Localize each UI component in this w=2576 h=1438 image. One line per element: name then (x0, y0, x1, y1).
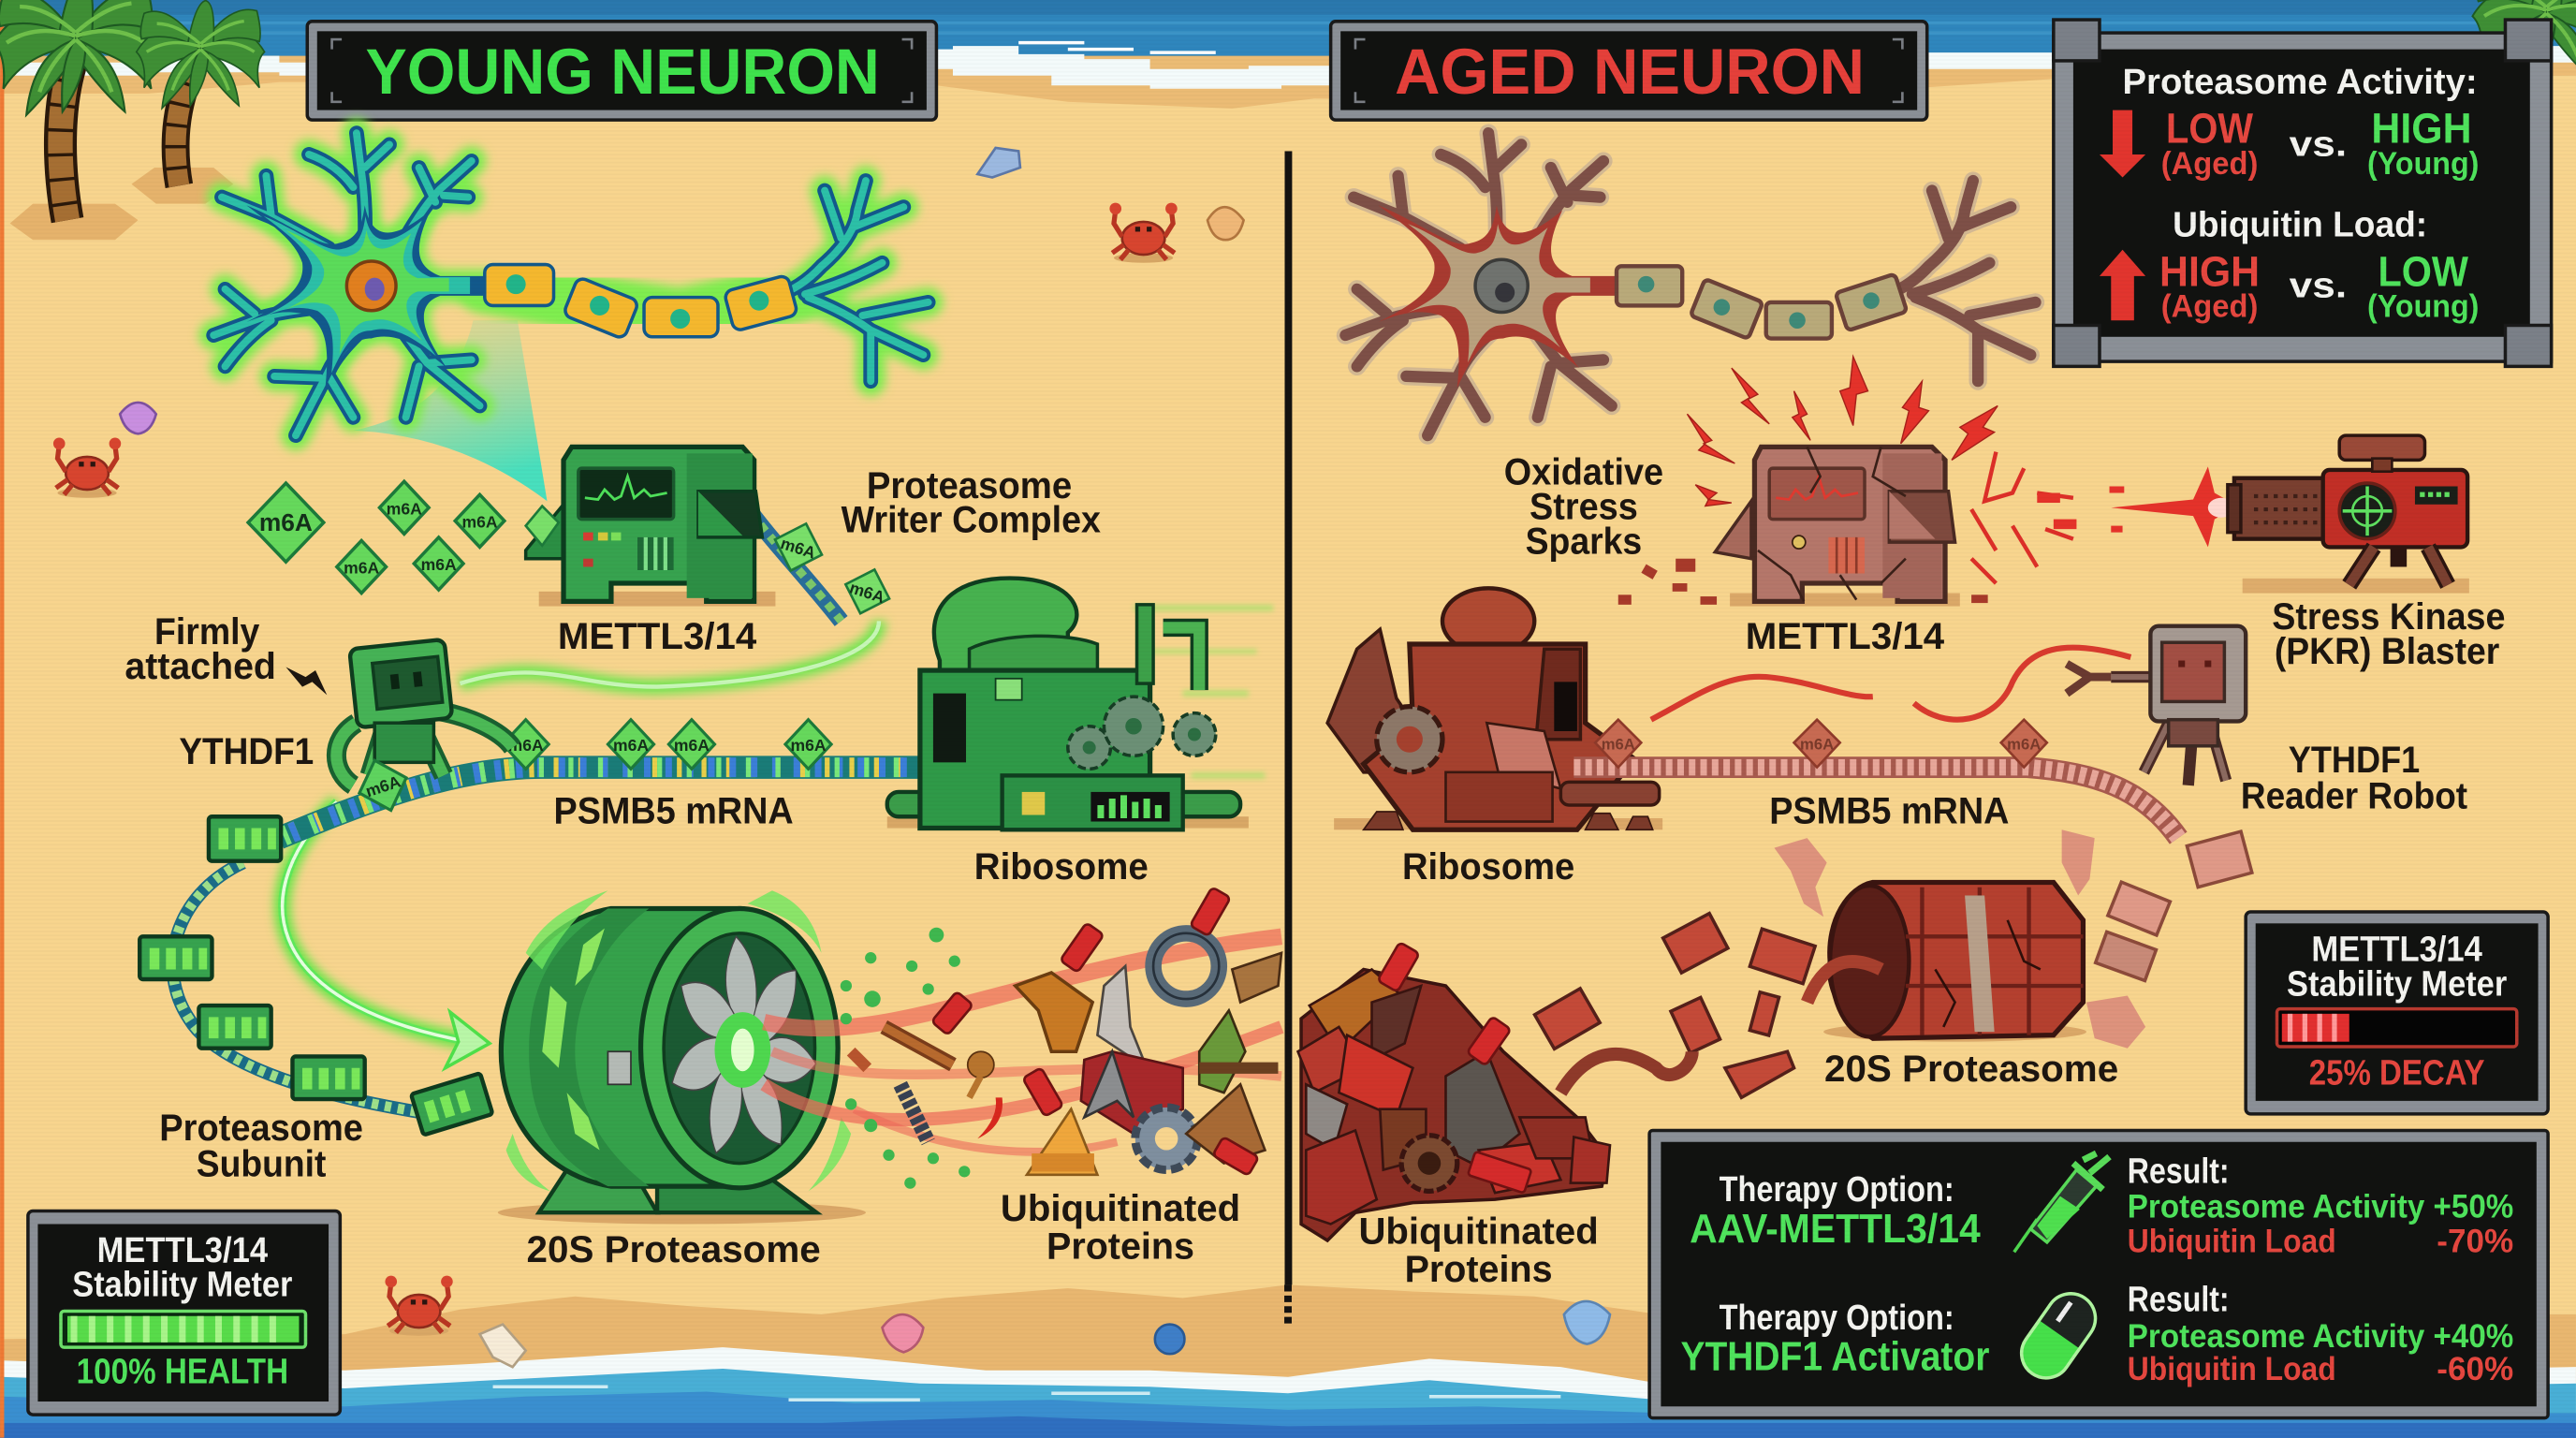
icon: syringe (2014, 1153, 2110, 1252)
callout cone from neuron to writer (353, 320, 547, 501)
panel: aged stability meter: METTL3/14 (2311, 930, 2482, 969)
label: firmly attached: attached (124, 646, 276, 687)
label: firmly attached: Firmly (154, 611, 259, 653)
green return arrow (283, 801, 490, 1068)
panel: proteasome and ubiquitin comparison: LOW (2378, 247, 2469, 295)
panel: proteasome and ubiquitin comparison (2054, 20, 2552, 366)
YTHDF1 reader robot young: m6A (363, 771, 403, 800)
label: oxidative stress sparks: Stress (1530, 487, 1638, 528)
label: 20S proteasome aged: 20S Proteasome (1824, 1049, 2118, 1090)
m6A marks aged: m6A (2007, 735, 2041, 753)
label: PSMB5 mRNA aged: PSMB5 mRNA (1769, 790, 2009, 831)
label: stress kinase blaster (2272, 596, 2505, 672)
label: 20S proteasome young: 20S Proteasome (527, 1229, 821, 1270)
m6A cluster: m6A (387, 499, 422, 518)
stress sparks (1687, 357, 1998, 506)
bottom sea and shoreline (0, 1284, 2576, 1438)
panel: therapy options: YTHDF1 Activator (1680, 1334, 1989, 1380)
ubiquitinated proteins young (764, 887, 1281, 1189)
panel: proteasome and ubiquitin comparison: Ubiquitin Load: (2173, 205, 2427, 244)
strand from writer to robot (460, 501, 879, 687)
icon: capsule (2012, 1284, 2105, 1387)
label: METTL3/14 aged: METTL3/14 (1746, 616, 1944, 657)
label: METTL3/14 young: METTL3/14 (558, 616, 756, 657)
panel: therapy options: -70% (2437, 1223, 2513, 1259)
top sea and shoreline (0, 0, 2576, 109)
20S proteasome young (498, 890, 866, 1224)
panel: therapy options: Ubiquitin Load (2128, 1223, 2336, 1259)
panel: young stability meter: Stability Meter (72, 1265, 293, 1304)
label: ubiquitinated proteins aged (1358, 1211, 1599, 1290)
label: PSMB5 mRNA young: PSMB5 mRNA (554, 790, 794, 831)
label: YTHDF1 young: YTHDF1 (179, 731, 314, 772)
beach critters and shells (53, 148, 1610, 1367)
label: proteasome writer complex: Proteasome (867, 465, 1072, 506)
aged red wavy reader signal (1651, 648, 2130, 720)
label: ubiquitinated proteins young (1001, 1188, 1240, 1267)
m6A marks aged: m6A (1800, 735, 1834, 753)
panel: proteasome and ubiquitin comparison: (Young) (2367, 146, 2479, 182)
icon: palm trees (0, 0, 2576, 240)
panel: therapy options (1649, 1130, 2548, 1418)
mRNA aged strand (1573, 768, 2178, 838)
YTHDF1 reader robot young (336, 639, 513, 818)
panel: young stability meter: METTL3/14 (97, 1230, 268, 1269)
panel: proteasome and ubiquitin comparison: HIGH (2159, 247, 2260, 295)
panel: therapy options: AAV-METTL3/14 (1690, 1206, 1981, 1252)
writer machine METTL3/14 young (526, 447, 897, 621)
left edge stripe (0, 0, 4, 1438)
label: ribosome young: Ribosome (974, 846, 1149, 888)
label: oxidative stress sparks: Sparks (1526, 521, 1642, 562)
m6A marks aged (1595, 720, 2047, 768)
ribosome aged (1327, 588, 1662, 829)
label: YTHDF1 reader robot: Reader Robot (2241, 775, 2467, 816)
panel: therapy options: Proteasome Activity +50% (2128, 1188, 2513, 1225)
label: proteasome subunit: Proteasome (159, 1108, 363, 1149)
m6A marks on mRNA: m6A (613, 736, 649, 755)
label: oxidative stress sparks (1504, 452, 1663, 562)
panel: therapy options: Proteasome Activity +40% (2128, 1318, 2513, 1355)
m6A cluster: m6A (462, 512, 498, 531)
panel: proteasome and ubiquitin comparison: Proteasome Activity: (2123, 62, 2478, 101)
label: YTHDF1 reader robot (2241, 740, 2467, 816)
m6A marks on mRNA: m6A (508, 736, 544, 755)
panel: therapy options: Ubiquitin Load (2128, 1351, 2336, 1387)
m6A marks aged: m6A (1602, 735, 1635, 753)
PKR stress kinase blaster (2037, 435, 2469, 594)
center divider (1284, 151, 1292, 1325)
panel: therapy options: -60% (2437, 1351, 2513, 1387)
panel: therapy options: Therapy Option: (1720, 1169, 1954, 1209)
YTHDF1 reader robot aged (2067, 626, 2246, 785)
label: proteasome writer complex: Writer Complex (842, 500, 1101, 541)
panel: aged stability meter (2246, 912, 2548, 1114)
title: young neuron (307, 22, 936, 120)
label: proteasome subunit (159, 1108, 363, 1185)
panel: proteasome and ubiquitin comparison: (Young) (2367, 289, 2479, 325)
m6A marks on mRNA: m6A (674, 736, 710, 755)
panel: young stability meter: 100% HEALTH (77, 1352, 288, 1391)
aged neuron illustration (1345, 133, 2036, 435)
title: aged neuron (1331, 22, 1927, 120)
panel: proteasome and ubiquitin comparison: vs. (2290, 266, 2347, 305)
label: stress kinase blaster: Stress Kinase (2272, 596, 2505, 638)
panel: therapy options: Result: (2128, 1280, 2230, 1319)
panel: therapy options: Therapy Option: (1720, 1298, 1954, 1337)
m6A cluster (248, 481, 505, 594)
panel: therapy options: Result: (2128, 1152, 2230, 1191)
panel: proteasome and ubiquitin comparison: vs. (2290, 125, 2347, 164)
label: YTHDF1 reader robot: YTHDF1 (2289, 740, 2420, 781)
label: ubiquitinated proteins aged: Ubiquitinated (1358, 1211, 1599, 1253)
label: ubiquitinated proteins aged: Proteins (1405, 1249, 1553, 1290)
label: ribosome aged: Ribosome (1402, 846, 1574, 888)
panel: young stability meter (28, 1211, 340, 1415)
title: aged neuron: AGED NEURON (1395, 36, 1865, 108)
label: ubiquitinated proteins young: Proteins (1046, 1225, 1194, 1267)
m6A cluster: m6A (344, 559, 380, 578)
ubiquitinated proteins pile aged (1298, 942, 1610, 1240)
label: stress kinase blaster: (PKR) Blaster (2275, 631, 2499, 672)
panel: proteasome and ubiquitin comparison: LOW (2166, 105, 2254, 153)
label: ubiquitinated proteins young: Ubiquitinated (1001, 1188, 1240, 1229)
label: proteasome writer complex (842, 465, 1101, 541)
20S proteasome aged and debris (1535, 829, 2252, 1097)
writer machine METTL3/14 young: m6A (779, 534, 818, 563)
m6A cluster: m6A (421, 555, 457, 574)
proteasome subunit chain (139, 816, 492, 1135)
panel: proteasome and ubiquitin comparison: HIGH (2371, 105, 2471, 153)
ribosome young (887, 579, 1273, 829)
panel: proteasome and ubiquitin comparison: (Aged) (2161, 146, 2258, 182)
panel: aged stability meter: 25% DECAY (2309, 1052, 2485, 1092)
young neuron illustration (213, 133, 929, 435)
m6A cluster: m6A (259, 508, 313, 536)
panel: aged stability meter: Stability Meter (2287, 964, 2508, 1004)
label: proteasome subunit: Subunit (197, 1144, 326, 1185)
writer machine METTL3/14 young: m6A (847, 578, 887, 607)
title: young neuron: YOUNG NEURON (366, 36, 880, 108)
cracked METTL machine aged (1618, 447, 2073, 607)
panel: proteasome and ubiquitin comparison: (Aged) (2161, 289, 2258, 325)
label: oxidative stress sparks: Oxidative (1504, 452, 1663, 493)
mRNA young strand (279, 768, 929, 838)
m6A marks on mRNA: m6A (791, 736, 827, 755)
label: firmly attached (124, 611, 327, 695)
m6A marks on mRNA (503, 720, 831, 769)
